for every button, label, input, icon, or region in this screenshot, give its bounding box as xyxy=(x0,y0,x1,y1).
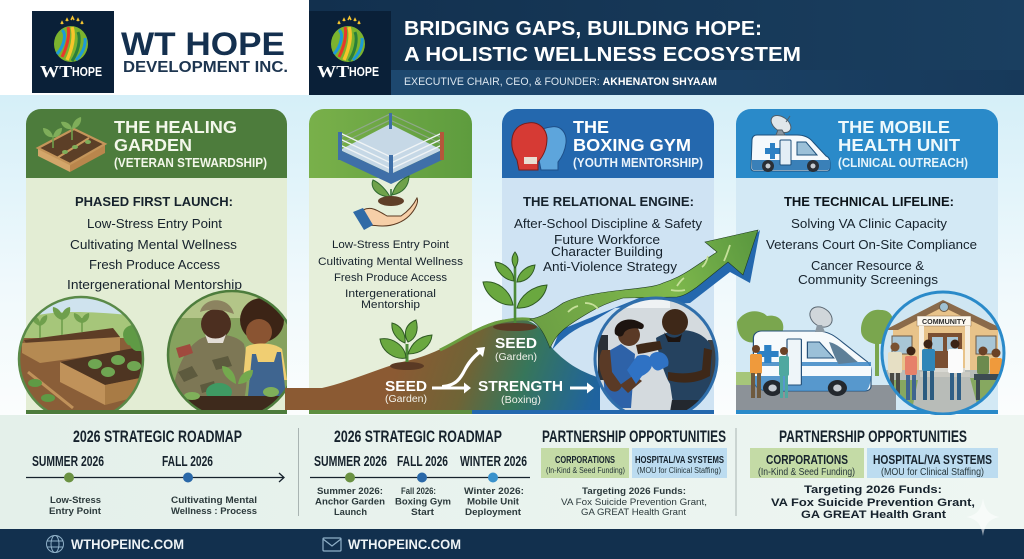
roadmap: three phase timeline: Launch xyxy=(334,507,367,517)
roadmap: three phase timeline: Mobile Unit xyxy=(467,496,519,506)
icon: health van with dish xyxy=(751,112,830,172)
roadmap: three phase timeline: Anchor Garden xyxy=(315,496,385,506)
funding text: GA GREAT Health Grant xyxy=(581,507,687,517)
roadmap: three phase timeline xyxy=(310,428,530,517)
text block: Fresh Produce Access xyxy=(89,258,220,272)
heading: THE HEALING xyxy=(114,117,237,137)
funding text: GA GREAT Health Grant xyxy=(801,509,946,521)
illustration: raised beds xyxy=(18,296,144,410)
arrows: white flow arrows xyxy=(432,347,594,394)
footer bar xyxy=(0,529,1024,559)
heading: THE MOBILE xyxy=(838,117,950,137)
arrow: growth arrow xyxy=(530,230,760,350)
text block: Veterans Court On-Site Compliance xyxy=(766,238,977,252)
funding text: VA Fox Suicide Prevention Grant, xyxy=(771,497,975,509)
roadmap: two phase timeline: Wellness : Process xyxy=(171,506,257,516)
text block: PHASED FIRST LAUNCH: xyxy=(75,194,233,209)
funding text xyxy=(561,486,707,517)
roadmap: two phase timeline: SUMMER 2026 xyxy=(32,454,104,470)
icon: boxing ring xyxy=(338,113,444,184)
label: seed garden lower: (Garden) xyxy=(385,394,427,405)
label: seed garden lower: SEED xyxy=(385,378,427,395)
card: hospital and VA systems: (MOU for Clinical Staffing) xyxy=(881,467,984,478)
brand name: WT HOPE xyxy=(121,26,285,62)
illustration: trees and road xyxy=(736,310,896,410)
text block: THE TECHNICAL LIFELINE: xyxy=(784,194,954,209)
illustration: community center and people xyxy=(878,290,1008,415)
funding text: VA Fox Suicide Prevention Grant, xyxy=(561,497,707,507)
icon: sparkle xyxy=(966,498,1000,536)
text block xyxy=(766,194,977,287)
illustration: ambulance van xyxy=(750,303,871,398)
brand name: DEVELOPMENT INC. xyxy=(123,59,288,76)
icon: raised garden bed xyxy=(38,117,105,172)
logo: WT Hope badge repeat xyxy=(309,11,391,95)
roadmap: three phase timeline: SUMMER 2026 xyxy=(314,454,387,470)
heading: BOXING GYM xyxy=(573,135,691,155)
roadmap: two phase timeline: 2026 STRATEGIC ROADMAP xyxy=(73,428,242,446)
illustration: boxing coach and youth xyxy=(594,296,718,410)
logo: WT Hope badge: WT xyxy=(40,62,73,81)
funding text: Targeting 2026 Funds: xyxy=(582,486,686,496)
heading: HEALTH UNIT xyxy=(838,135,960,155)
text block: Low-Stress Entry Point xyxy=(87,217,223,231)
header: navy title banner xyxy=(309,0,1024,95)
partnerships: compact column xyxy=(541,428,727,517)
logo: WT Hope badge: HOPE xyxy=(72,64,102,79)
heading: (YOUTH MENTORSHIP) xyxy=(573,156,703,170)
roadmap: three phase timeline: Deployment xyxy=(465,507,521,517)
website: WTHOPEINC.COM xyxy=(71,536,184,552)
logo: WT Hope badge xyxy=(32,11,114,93)
roadmap: two phase timeline: Entry Point xyxy=(49,506,101,516)
card: corporations: (In-Kind & Seed Funding) xyxy=(546,466,625,475)
illustration: community center and people: COMMUNITY xyxy=(922,319,966,326)
icon: small seedling xyxy=(380,320,432,370)
card: hospital and VA systems: HOSPITAL/VA SYSTEMS xyxy=(635,454,724,466)
roadmap: two phase timeline xyxy=(26,428,284,516)
funding text: Targeting 2026 Funds: xyxy=(804,484,942,496)
text block: Future Workforce xyxy=(554,233,660,247)
title xyxy=(404,18,801,66)
roadmap: three phase timeline: Start xyxy=(411,507,434,517)
card: corporations: (In-Kind & Seed Funding) xyxy=(758,467,855,478)
heading: GARDEN xyxy=(114,135,192,155)
roadmap: three phase timeline: Boxing Gym xyxy=(395,496,451,506)
icon: globe xyxy=(46,536,64,552)
text block: Low-Stress Entry Point xyxy=(332,239,449,251)
subtitle: executive line: EXECUTIVE CHAIR, CEO, & FOUNDER: AKHENATON SHYAAM xyxy=(404,76,717,88)
roadmap: two phase timeline: FALL 2026 xyxy=(162,454,213,470)
icon: hand holding seedling xyxy=(353,176,418,230)
card: hospital and VA systems xyxy=(867,448,998,478)
funding text xyxy=(771,484,975,521)
figure: nurse xyxy=(779,347,789,398)
partnerships: compact column: PARTNERSHIP OPPORTUNITIES xyxy=(542,428,726,446)
heading xyxy=(838,117,968,170)
text block xyxy=(514,194,703,274)
text block: Cultivating Mental Wellness xyxy=(70,238,237,252)
illustration: growth path hill xyxy=(285,230,760,410)
header: white logo block xyxy=(0,0,308,95)
text block: Fresh Produce Access xyxy=(334,272,447,284)
heading: (CLINICAL OUTREACH) xyxy=(838,156,968,170)
illustration: veteran and child planting xyxy=(166,290,287,410)
icon: envelope xyxy=(323,538,341,551)
partnerships: emphasized column xyxy=(750,428,998,521)
panel: mobile health unit xyxy=(736,109,1008,415)
title: BRIDGING GAPS, BUILDING HOPE: xyxy=(404,18,762,40)
panel: bridge seed to strength xyxy=(309,109,472,414)
heading xyxy=(573,117,703,170)
text block: Solving VA Clinic Capacity xyxy=(791,217,948,231)
contact: WTHOPEINC.COM xyxy=(348,536,461,552)
roadmap: two phase timeline: Cultivating Mental xyxy=(171,495,257,505)
text block: Mentorship xyxy=(361,299,420,311)
logo: WT Hope badge repeat: WT xyxy=(317,62,350,81)
text block: Community Screenings xyxy=(798,273,938,287)
label: seed garden lower xyxy=(385,378,427,405)
card: corporations: CORPORATIONS xyxy=(555,454,615,466)
card: corporations xyxy=(541,448,629,478)
card: corporations xyxy=(750,448,864,478)
text block: Character Building xyxy=(551,245,663,259)
roadmap: three phase timeline: WINTER 2026 xyxy=(460,454,527,470)
label: seed garden upper: (Garden) xyxy=(495,352,537,363)
card: hospital and VA systems xyxy=(632,448,727,478)
text block: THE RELATIONAL ENGINE: xyxy=(523,194,694,209)
card: hospital and VA systems: (MOU for Clinical Staffing) xyxy=(637,466,721,475)
card: hospital and VA systems: HOSPITAL/VA SYSTEMS xyxy=(873,452,992,467)
text block: After-School Discipline & Safety xyxy=(514,217,703,231)
text block: Intergenerational xyxy=(345,288,436,300)
panel: healing garden xyxy=(15,109,296,421)
label: seed garden upper xyxy=(495,335,537,363)
label: strength boxing xyxy=(478,378,563,406)
brand name xyxy=(121,26,288,76)
icon: boxing gloves xyxy=(512,123,566,170)
heading: (VETERAN STEWARDSHIP) xyxy=(114,156,267,170)
icon: tall seedling xyxy=(483,252,547,331)
roadmap: three phase timeline: Fall 2026: xyxy=(401,486,436,496)
text block: Anti-Violence Strategy xyxy=(543,260,678,274)
heading xyxy=(114,117,267,170)
text block xyxy=(67,194,242,292)
page background xyxy=(0,95,1024,415)
text block: Cancer Resource & xyxy=(811,259,925,273)
title: A HOLISTIC WELLNESS ECOSYSTEM xyxy=(404,44,801,66)
roadmap: three phase timeline: Summer 2026: xyxy=(317,486,383,496)
roadmap: three phase timeline: Winter 2026: xyxy=(464,486,524,496)
label: strength boxing: STRENGTH xyxy=(478,378,563,395)
label: strength boxing: (Boxing) xyxy=(501,395,541,406)
bottom band xyxy=(0,415,1024,529)
text block: Intergenerational Mentorship xyxy=(67,278,242,292)
figure: person in orange xyxy=(750,345,762,398)
panel: boxing gym xyxy=(472,109,714,414)
label: seed garden upper: SEED xyxy=(495,335,537,352)
roadmap: three phase timeline: 2026 STRATEGIC ROADMAP xyxy=(334,428,502,446)
roadmap: three phase timeline: FALL 2026 xyxy=(397,454,448,470)
logo: WT Hope badge repeat: HOPE xyxy=(349,64,379,79)
card: corporations: CORPORATIONS xyxy=(766,452,848,467)
roadmap: two phase timeline: Low-Stress xyxy=(50,495,101,505)
heading: THE xyxy=(573,117,609,137)
text block xyxy=(318,239,464,311)
text block: Cultivating Mental Wellness xyxy=(318,256,464,268)
